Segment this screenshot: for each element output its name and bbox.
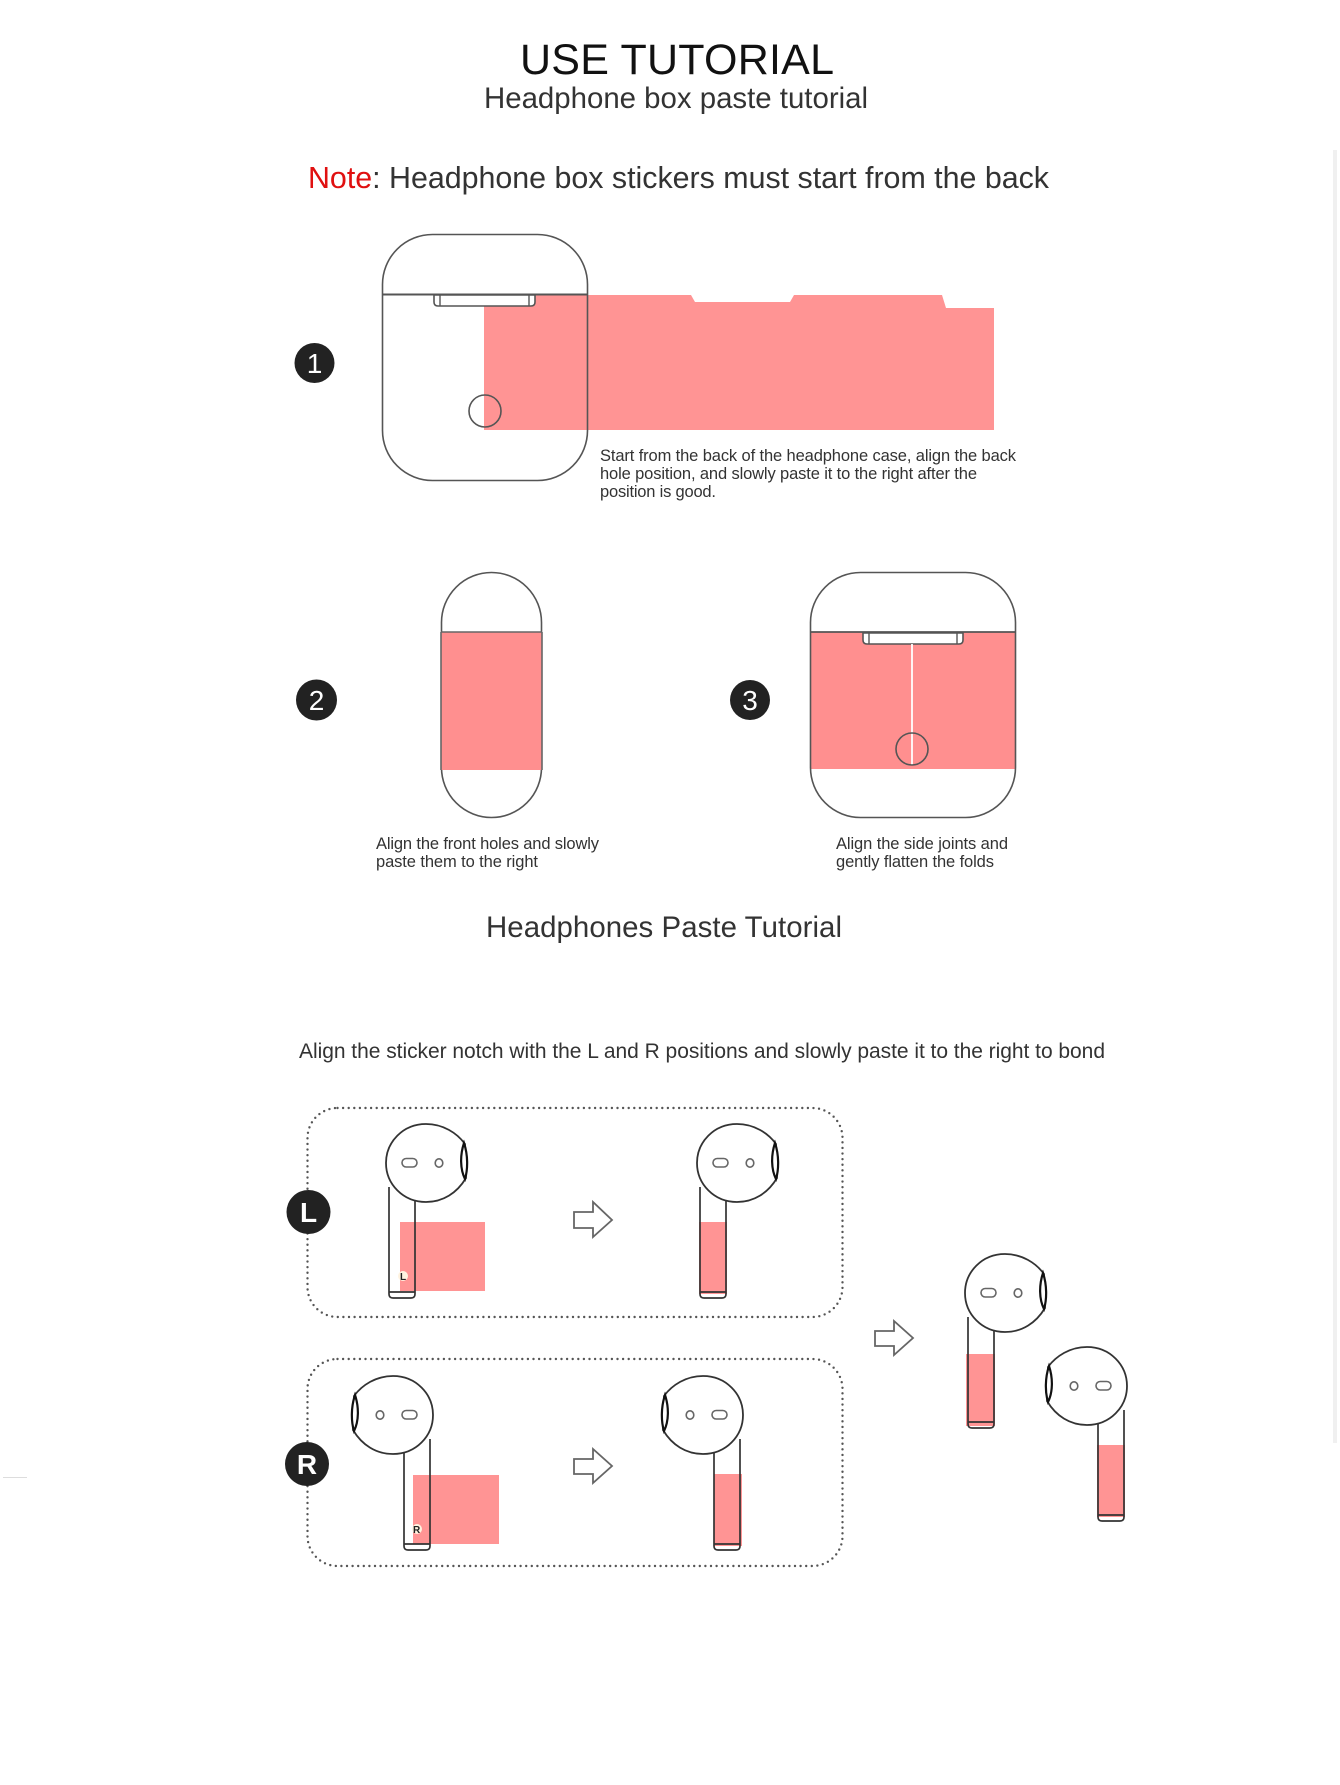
step 3 caption: gently flatten the folds (836, 853, 994, 871)
subtitle: headphone box paste tutorial: Headphone box paste tutorial (484, 82, 868, 115)
instruction: Align the sticker notch with the L and R positions and slowly paste it to the right to bond (299, 1040, 1105, 1063)
arrow to finished pair (875, 1321, 913, 1355)
seam line (911, 644, 913, 765)
panel: left earbud (286, 1108, 842, 1317)
badge 2 (296, 680, 337, 720)
step 1 caption (600, 447, 1017, 501)
finished right earbud (1046, 1347, 1127, 1521)
sticker on side (441, 632, 542, 770)
step 3 diagram (810, 572, 1016, 818)
step 3 caption (836, 835, 1008, 871)
case side outline (442, 572, 542, 818)
dotted frame L (308, 1108, 842, 1317)
case back outline (382, 234, 588, 480)
earbud L after (697, 1124, 778, 1298)
sticker on front (810, 632, 1015, 769)
earbud R after (662, 1376, 743, 1550)
step 1 caption: position is good. (600, 483, 716, 501)
note: Note: Headphone box stickers must start from the back (308, 161, 1050, 195)
badge R (285, 1442, 329, 1486)
badge L: L (300, 1197, 317, 1228)
case front outline (810, 572, 1016, 818)
page edge stripe (1333, 150, 1337, 1443)
step 3 caption: Align the side joints and (836, 835, 1008, 853)
step 2 caption: Align the front holes and slowly (376, 835, 600, 853)
badge 3: 3 (742, 685, 758, 716)
back hole (469, 395, 501, 427)
badge 3 (730, 680, 770, 720)
earbud L before (386, 1124, 485, 1298)
heading: headphones paste tutorial: Headphones Paste Tutorial (486, 911, 842, 944)
dotted frame R (308, 1359, 842, 1566)
badge L (286, 1190, 330, 1234)
earbud R before: R (413, 1525, 421, 1536)
step 1 diagram (382, 234, 994, 480)
title: USE TUTORIAL (520, 36, 834, 84)
arrow L (574, 1202, 612, 1237)
left edge mark (3, 1477, 27, 1478)
earbud L before: L (400, 1272, 406, 1283)
panel: right earbud (285, 1359, 842, 1566)
step 2 caption (376, 835, 600, 871)
front hole (896, 733, 928, 765)
finished left earbud (965, 1254, 1046, 1428)
badge 2: 2 (309, 685, 324, 716)
arrow R (574, 1449, 612, 1483)
sticker strip (484, 295, 994, 430)
badge 1: 1 (307, 348, 322, 379)
badge R: R (297, 1449, 317, 1480)
earbud R before (352, 1376, 499, 1550)
step 1 caption: hole position, and slowly paste it to the right after the (600, 465, 977, 483)
step 2 diagram (441, 572, 542, 818)
badge 1 (294, 343, 334, 383)
step 1 caption: Start from the back of the headphone case, align the back (600, 447, 1017, 465)
step 2 caption: paste them to the right (376, 853, 538, 871)
